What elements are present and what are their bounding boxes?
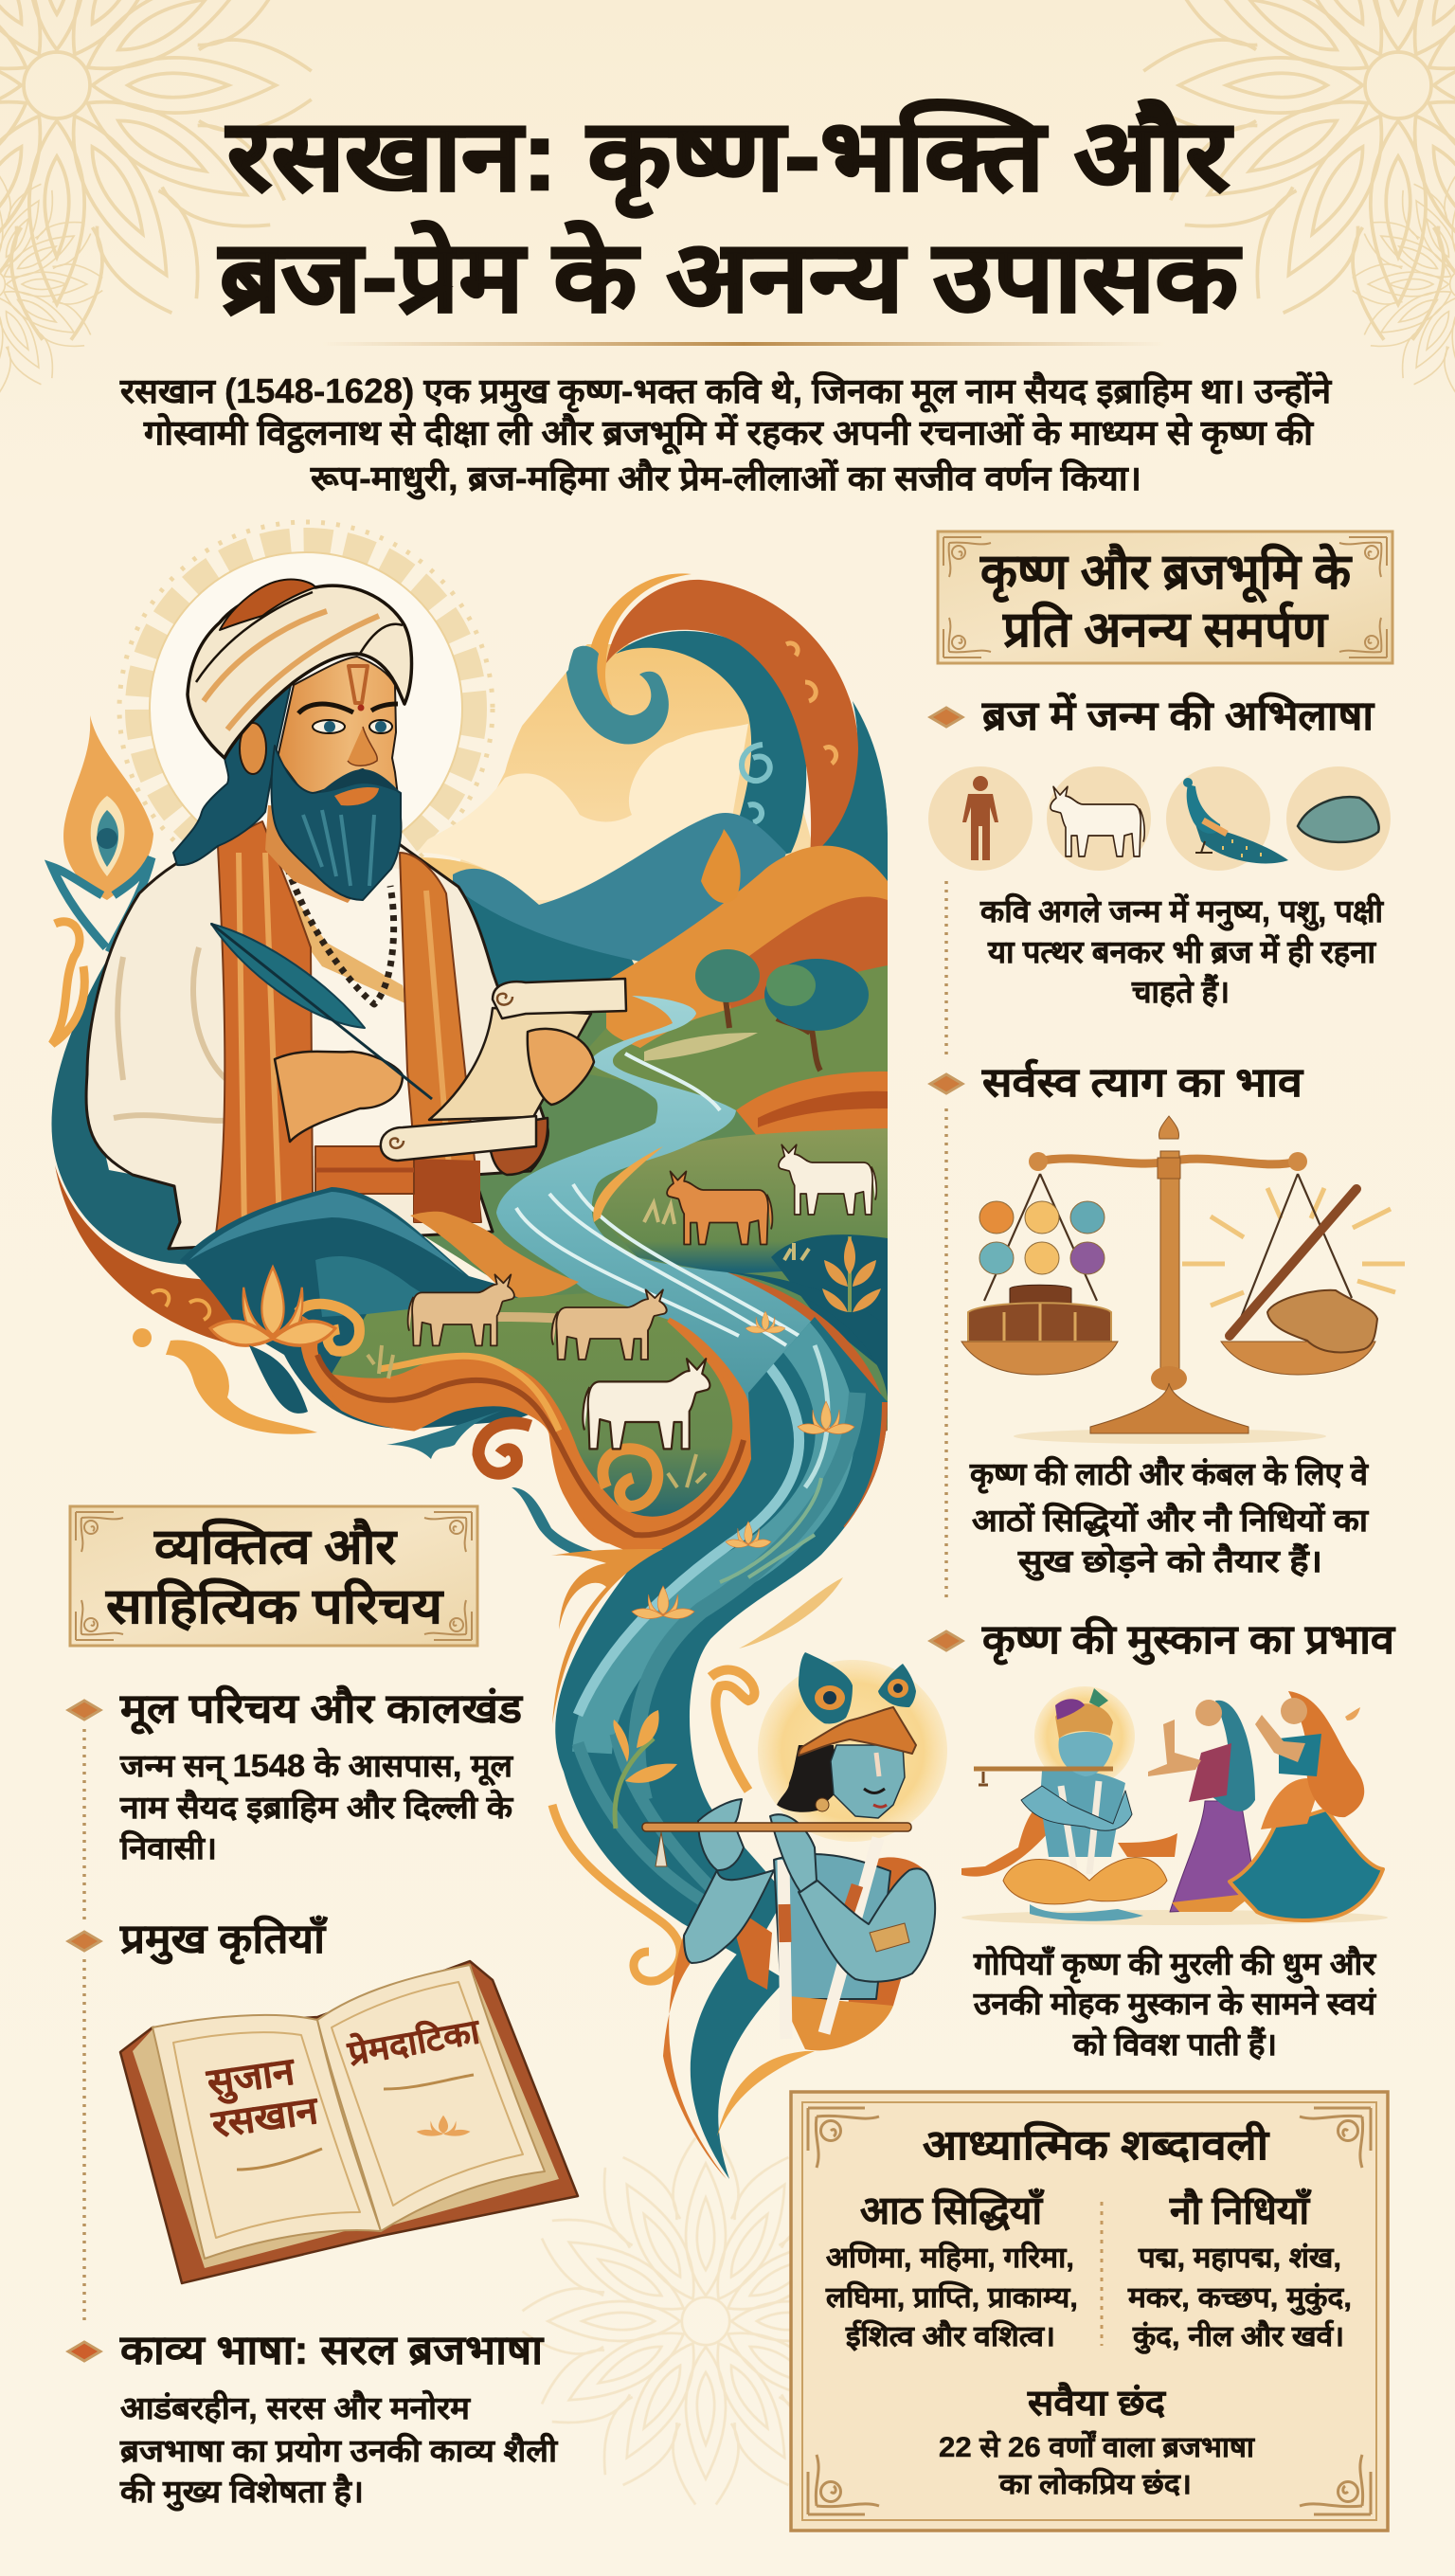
illustration: open book bbox=[120, 1961, 578, 2283]
column: nine nidhis: कुंद, नील और खर्व। bbox=[1132, 2319, 1344, 2354]
renunciation text bbox=[969, 1455, 1370, 1581]
column: eight siddhis bbox=[825, 2188, 1078, 2352]
poet figure bbox=[86, 580, 626, 1249]
icon row: man, cow, peacock, stone bbox=[928, 766, 1391, 871]
left item: origin: नाम सैयद इब्राहिम और दिल्ली के bbox=[119, 1789, 514, 1825]
section header: right: प्रति अनन्य समर्पण bbox=[1002, 601, 1329, 658]
column: nine nidhis bbox=[1127, 2188, 1352, 2354]
illustration: open book: प्रेमदाटिका bbox=[344, 2011, 484, 2073]
river upper bbox=[496, 996, 888, 1459]
cuff bbox=[248, 1059, 290, 1194]
section header: right: कृष्ण और ब्रजभूमि के bbox=[979, 543, 1353, 603]
flute bbox=[642, 1823, 911, 1866]
krishna tail bbox=[663, 1933, 727, 2179]
sleeve drape bbox=[489, 1118, 548, 1175]
strings bbox=[984, 1174, 1352, 1337]
swirl bands bbox=[822, 701, 888, 881]
lower stream bbox=[540, 1307, 890, 1971]
sun rays bbox=[1182, 1188, 1405, 1306]
torso bbox=[1021, 1770, 1132, 1874]
green pocket bbox=[332, 1293, 752, 1535]
column: eight siddhis: अणिमा, महिमा, गरिमा, bbox=[826, 2241, 1074, 2274]
birth wish text: या पत्थर बनकर भी ब्रज में ही रहना bbox=[987, 933, 1376, 969]
scroll paper bbox=[429, 1008, 591, 1120]
meadow plant bbox=[822, 1236, 881, 1312]
intro paragraph bbox=[119, 371, 1333, 500]
eyes bbox=[313, 720, 392, 733]
left item: origin: मूल परिचय और कालखंड bbox=[119, 1684, 524, 1735]
lathi stick bbox=[1230, 1189, 1356, 1336]
left item: origin: जन्म सन् 1548 के आसपास, मूल bbox=[119, 1747, 514, 1786]
trees bbox=[695, 949, 869, 1071]
left spiral by lotus bbox=[298, 1304, 359, 1351]
panel: spiritual glossary bbox=[791, 2092, 1388, 2531]
left item: origin: निवासी। bbox=[119, 1829, 217, 1865]
right hand on flute bbox=[770, 1814, 817, 1892]
icon: person bbox=[962, 776, 998, 860]
smile text bbox=[973, 1945, 1377, 2062]
timeline: right bbox=[944, 881, 948, 1601]
smile text: उनकी मोहक मुस्कान के सामने स्वयं bbox=[973, 1985, 1377, 2024]
section header: left: व्यक्तित्व और bbox=[153, 1518, 398, 1575]
blanket bbox=[1267, 1290, 1377, 1352]
birth wish text: चाहते हैं। bbox=[1131, 973, 1230, 1009]
illustration: krishna with gopis bbox=[961, 1686, 1388, 1925]
ear bbox=[240, 723, 266, 774]
kurta bbox=[86, 843, 548, 1249]
upper scroll roll bbox=[493, 979, 626, 1018]
savaiya bbox=[939, 2382, 1255, 2500]
column: nine nidhis: नौ निधियाँ bbox=[1169, 2188, 1312, 2232]
dry path bbox=[493, 1312, 597, 1326]
illustration: open book: सुजान bbox=[204, 2050, 299, 2107]
tilak bbox=[349, 666, 368, 703]
orange hills bbox=[606, 846, 888, 1061]
left item: language: काव्य भाषा: सरल ब्रजभाषा bbox=[119, 2328, 545, 2373]
left item: language: आडंबरहीन, सरस और मनोरम bbox=[120, 2389, 471, 2425]
orange hill bbox=[410, 1212, 579, 1298]
heading: आध्यात्मिक शब्दावली bbox=[923, 2120, 1270, 2169]
clouds bbox=[418, 724, 748, 900]
turban bbox=[188, 585, 411, 758]
treasure chests bbox=[968, 1285, 1111, 1342]
flute bbox=[974, 1769, 1113, 1785]
nose bbox=[348, 727, 377, 766]
left teal band behind poet bbox=[51, 910, 237, 1265]
illustration: krishna with flute bbox=[642, 1652, 947, 2050]
right orange river bank bbox=[728, 1272, 887, 1432]
icon: stone bbox=[1298, 797, 1379, 842]
title: रसखान: कृष्ण-भक्ति और bbox=[225, 99, 1233, 218]
title divider bbox=[322, 342, 1165, 346]
renunciation text: आठों सिद्धियों और नौ निधियों का bbox=[972, 1502, 1370, 1538]
column: eight siddhis: ईशित्व और वशित्व। bbox=[845, 2319, 1055, 2352]
right item: birth wish heading: ब्रज में जन्म की अभिलाषा bbox=[981, 692, 1375, 739]
left item: language: ब्रजभाषा का प्रयोग उनकी काव्य शैली bbox=[119, 2432, 559, 2468]
rust scroll spiral bbox=[478, 1423, 530, 1473]
section header: right bbox=[938, 531, 1392, 663]
mustache and lips bbox=[319, 769, 401, 805]
scarves bbox=[961, 1800, 1177, 1877]
left hand on flute bbox=[698, 1799, 744, 1870]
left item: major works bbox=[68, 1915, 328, 1965]
torso bbox=[774, 1854, 890, 1999]
neck bbox=[265, 805, 388, 903]
right item: renunciation heading: सर्वस्व त्याग का भाव bbox=[981, 1058, 1304, 1106]
section header: left: साहित्यिक परिचय bbox=[105, 1577, 444, 1634]
gopi 2 bbox=[1230, 1691, 1383, 1920]
land base bbox=[424, 1012, 888, 1431]
illustration: balance scale bbox=[961, 1116, 1405, 1444]
beard bbox=[272, 746, 401, 900]
icon: peacock feather bbox=[52, 715, 153, 1044]
orange swirl band bbox=[302, 1320, 751, 1552]
column: eight siddhis: आठ सिद्धियाँ bbox=[860, 2188, 1045, 2232]
green meadows bbox=[568, 965, 888, 1110]
lower teal sprig bbox=[512, 1487, 627, 1560]
meadow bank bbox=[593, 1146, 663, 1222]
hair bbox=[173, 685, 291, 865]
left item: major works: प्रमुख कृतियाँ bbox=[119, 1915, 328, 1965]
right hand bbox=[528, 1029, 594, 1105]
sash bbox=[315, 1146, 414, 1194]
inner chest bbox=[290, 857, 417, 1156]
meadow grass bbox=[644, 1203, 809, 1260]
teal sprig bbox=[386, 1410, 504, 1459]
left arm bbox=[684, 1870, 774, 1963]
icon: peacock bbox=[1183, 778, 1288, 863]
orange cloak bbox=[848, 1857, 930, 2023]
cows bbox=[408, 1144, 876, 1449]
icon: man halo mandala bbox=[119, 522, 493, 895]
illustration: open book: रसखान bbox=[208, 2089, 322, 2146]
savaiya: सवैया छंद bbox=[1027, 2382, 1167, 2423]
intro paragraph: गोस्वामी विट्ठलनाथ से दीक्षा ली और ब्रजभूमि में रहकर अपनी रचनाओं के माध्यम से कृष्ण की bbox=[143, 413, 1315, 455]
pocket spiral bbox=[602, 1449, 657, 1506]
intro paragraph: रसखान (1548-1628) एक प्रमुख कृष्ण-भक्त कवि थे, जिनका मूल नाम सैयद इब्राहिम था। उन्होंने bbox=[119, 371, 1333, 413]
beam and post bbox=[1029, 1116, 1307, 1433]
smile text: को विवश पाती हैं। bbox=[1072, 2026, 1277, 2062]
stream ornaments bbox=[551, 1311, 854, 2179]
savaiya: का लोकप्रिय छंद। bbox=[998, 2467, 1192, 2500]
hair bbox=[777, 1745, 838, 1812]
intro paragraph: रूप-माधुरी, ब्रज-महिमा और प्रेम-लीलाओं का सजीव वर्णन किया। bbox=[310, 459, 1141, 500]
gold edge along stream bbox=[551, 1549, 663, 1724]
renunciation text: सुख छोड़ने को तैयार हैं। bbox=[1017, 1542, 1322, 1581]
brows bbox=[298, 704, 398, 713]
birth wish text bbox=[979, 892, 1384, 1009]
quill feather bbox=[211, 924, 365, 1028]
face bbox=[1058, 1732, 1113, 1776]
icon: cow bbox=[1051, 786, 1144, 856]
sky bbox=[460, 644, 811, 964]
face bbox=[831, 1745, 905, 1818]
column: nine nidhis: पद्म, महापद्म, शंख, bbox=[1138, 2243, 1341, 2274]
face bbox=[278, 657, 398, 815]
gopi 1 bbox=[1148, 1700, 1255, 1912]
pocket grass bbox=[368, 1345, 706, 1487]
peacock feathers on crown bbox=[799, 1652, 916, 1723]
left item: origin bbox=[68, 1684, 524, 1865]
writing forearm and hand bbox=[275, 1052, 403, 1142]
birth wish text: कवि अगले जन्म में मनुष्य, पशु, पक्षी bbox=[979, 892, 1384, 931]
armband bbox=[870, 1923, 909, 1952]
teal wave bbox=[180, 1187, 587, 1429]
rust band bbox=[55, 1165, 241, 1345]
central illustration: flowing landscape bbox=[51, 522, 947, 2179]
right pan bbox=[1221, 1342, 1375, 1375]
landscape scene bbox=[417, 573, 888, 1459]
section header: left bbox=[70, 1506, 477, 1646]
turban bbox=[1055, 1688, 1113, 1738]
column: eight siddhis: लघिमा, प्राप्ति, प्राकाम्य, bbox=[825, 2280, 1078, 2314]
column: nine nidhis: मकर, कच्छप, मुकुंद, bbox=[1127, 2282, 1352, 2315]
timeline: left bbox=[82, 1729, 86, 2321]
lotus bbox=[210, 1267, 335, 1345]
right arm bbox=[799, 1868, 935, 1982]
smile text: गोपियाँ कृष्ण की मुरली की धुम और bbox=[973, 1945, 1377, 1984]
teal mountains bbox=[453, 813, 786, 962]
lower scroll roll bbox=[381, 1116, 536, 1161]
title: ब्रज-प्रेम के अनन्य उपासक bbox=[218, 221, 1243, 333]
left item: language: की मुख्य विशेषता है। bbox=[119, 2473, 364, 2512]
necklace bbox=[284, 857, 394, 1004]
foreground waves under poet bbox=[55, 1165, 752, 1560]
orbs bbox=[979, 1201, 1105, 1274]
savaiya: 22 से 26 वर्णों वाला ब्रजभाषा bbox=[939, 2430, 1255, 2463]
spiral dot and gold tail bbox=[133, 1328, 317, 1434]
legs bbox=[1003, 1858, 1167, 1921]
title bbox=[218, 99, 1243, 333]
teal under lotus bbox=[249, 1345, 308, 1414]
scarves bbox=[215, 821, 313, 1241]
renunciation text: कृष्ण की लाठी और कंबल के लिए वे bbox=[969, 1455, 1370, 1494]
left item: language bbox=[68, 2328, 559, 2512]
left pan bbox=[961, 1342, 1118, 1375]
crown band bbox=[799, 1707, 916, 1756]
right item: smile heading: कृष्ण की मुस्कान का प्रभाव bbox=[981, 1615, 1396, 1666]
